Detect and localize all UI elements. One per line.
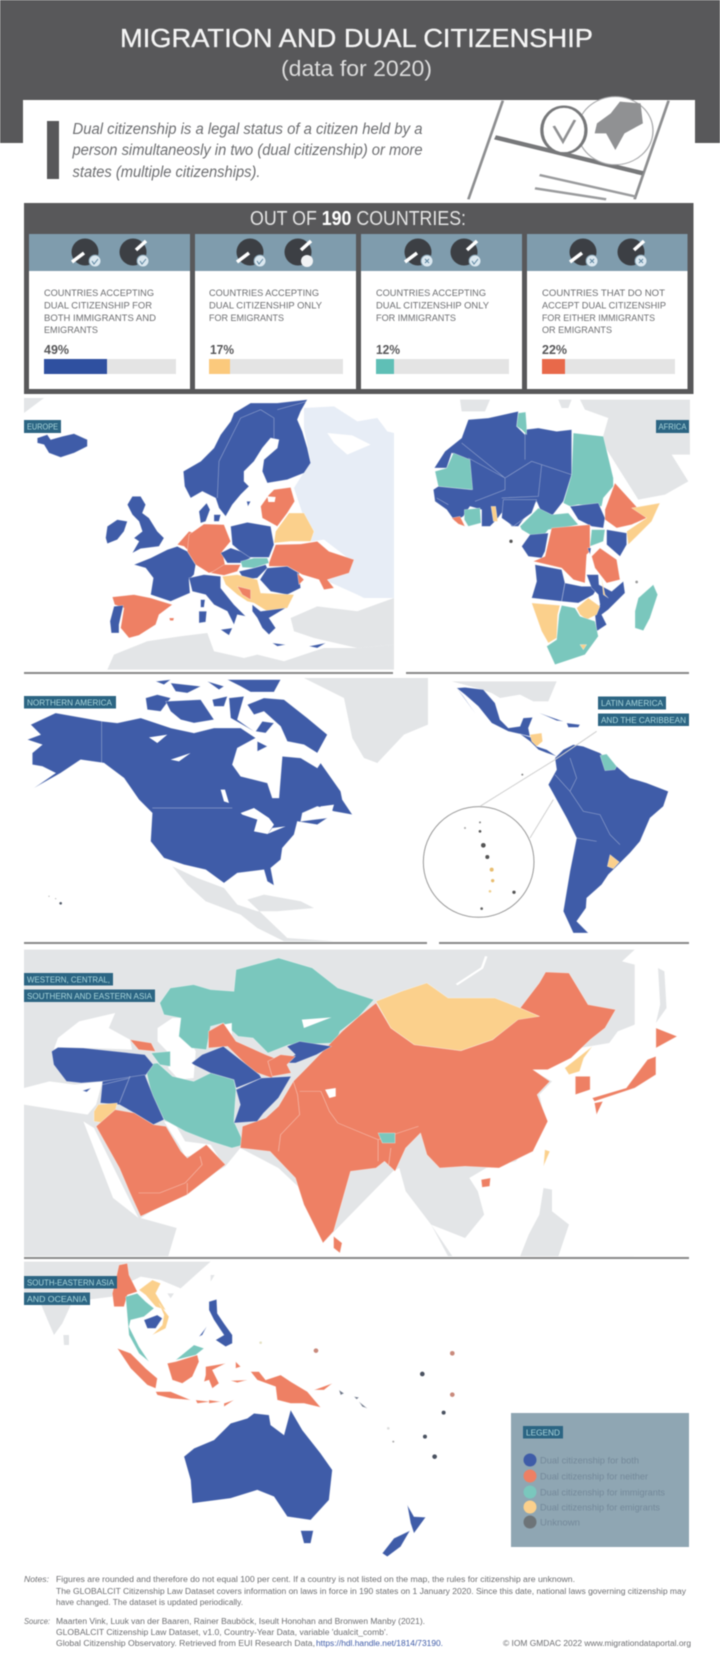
legend: Dual citizenship for both [540, 1456, 639, 1466]
label: Northern America [24, 696, 116, 708]
map: Northern America [27, 678, 428, 941]
notes: Notes: [24, 1575, 49, 1584]
card: both: 49% [44, 342, 69, 357]
source: Maarten Vink, Luuk van der Baaren, Rainer Bauböck, Iseult Honohan and Bronwen Manby (2021). [56, 1617, 425, 1626]
legend: Dual citizenship for emigrants [540, 1502, 660, 1514]
label: Africa [656, 420, 689, 433]
card: both: DUAL CITIZENSHIP FOR [44, 300, 152, 312]
label: Africa: AFRICA [658, 422, 687, 432]
card: neither: OR EMIGRANTS [542, 325, 612, 336]
legend: Unknown [540, 1518, 580, 1528]
notes [24, 1575, 686, 1607]
card: neither: COUNTRIES THAT DO NOT [542, 288, 665, 299]
card: both: COUNTRIES ACCEPTING [44, 288, 154, 299]
label: Northern America: NORTHERN AMERICA [27, 698, 113, 708]
card: immigrants only: 12% [376, 342, 400, 357]
legend: LEGEND [526, 1428, 560, 1438]
notes: have changed. The dataset is updated periodically. [56, 1598, 243, 1607]
map: Europe [24, 398, 394, 670]
source: https://hdl.handle.net/1814/73190. [316, 1639, 443, 1648]
label: Latin America and the Caribbean: AND THE CARIBBEAN [601, 716, 686, 725]
card: immigrants only: FOR IMMIGRANTS [376, 313, 456, 324]
card: immigrants only: DUAL CITIZENSHIP ONLY [376, 300, 490, 312]
notes: The GLOBALCIT Citizenship Law Dataset covers information on laws in force in 190 states on 1 January 2020. Since this date, national laws governing citizenship may [56, 1587, 686, 1596]
source [24, 1617, 443, 1648]
card: neither: 22% [542, 342, 567, 357]
subtitle: (data for 2020) [281, 56, 432, 81]
panel heading: OUT OF 190 COUNTRIES: [250, 208, 466, 230]
label: Europe [24, 420, 61, 433]
card: emigrants only: DUAL CITIZENSHIP ONLY [209, 300, 323, 312]
card: both: BOTH IMMIGRANTS AND [44, 313, 156, 324]
label: Latin America and the Caribbean [598, 696, 689, 726]
card: both [29, 234, 190, 389]
label: Europe: EUROPE [27, 422, 58, 432]
label: Latin America and the Caribbean: LATIN AMERICA [601, 699, 664, 708]
card: immigrants only: COUNTRIES ACCEPTING [376, 288, 486, 299]
card: emigrants only: FOR EMIGRANTS [209, 313, 284, 324]
card: both: EMIGRANTS [44, 325, 98, 336]
label: South-Eastern Asia and Oceania [24, 1276, 117, 1305]
card: neither: ACCEPT DUAL CITIZENSHIP [542, 300, 666, 312]
legend [511, 1413, 689, 1547]
source: Source: [24, 1617, 50, 1626]
intro text block: person simultaneosly in two (dual citizenship) or more [72, 142, 423, 159]
card: emigrants only: 17% [210, 342, 234, 357]
inset: Caribbean islands [423, 731, 597, 917]
copyright: © IOM GMDAC 2022 www.migrationdataportal.org [503, 1639, 691, 1648]
title: MIGRATION AND DUAL CITIZENSHIP [120, 25, 593, 53]
source: GLOBALCIT Citizenship Law Dataset, v1.0, Country-Year Data, variable 'dualcit_comb'. [56, 1628, 388, 1637]
intro text block [47, 121, 423, 181]
label: Western, Central, Southern and Eastern Asia [24, 973, 155, 1002]
card: immigrants only [361, 234, 522, 389]
panel: out of 190 countries [24, 203, 694, 394]
label: Western, Central, Southern and Eastern Asia: WESTERN, CENTRAL, [27, 976, 110, 984]
card: neither [527, 234, 688, 389]
label: Western, Central, Southern and Eastern Asia: SOUTHERN AND EASTERN ASIA [27, 992, 153, 1001]
map: Latin America and the Caribbean [423, 681, 668, 933]
notes: Figures are rounded and therefore do not equal 100 per cent. If a country is not listed on the map, the rules for citizenship are unknown. [56, 1575, 575, 1584]
card: emigrants only [195, 234, 356, 389]
source: Global Citizenship Observatory. Retrieved from EUI Research Data, [56, 1639, 315, 1648]
label: South-Eastern Asia and Oceania: SOUTH-EASTERN ASIA [27, 1278, 115, 1288]
map: South-Eastern Asia and Oceania [24, 1262, 455, 1557]
legend: Dual citizenship for immigrants [540, 1488, 665, 1498]
intro text block: states (multiple citizenships). [72, 164, 260, 181]
map: Western, Central, Southern and Eastern Asia [24, 950, 689, 1256]
dividers [24, 672, 689, 1259]
intro text block: Dual citizenship is a legal status of a citizen held by a [72, 121, 423, 138]
map: Africa [433, 400, 690, 665]
card: neither: FOR EITHER IMMIGRANTS [542, 313, 655, 324]
icon: passport with globe and check stamp [468, 97, 669, 199]
legend: Dual citizenship for neither [540, 1472, 648, 1482]
header band [0, 0, 720, 143]
card: emigrants only: COUNTRIES ACCEPTING [209, 288, 319, 299]
label: South-Eastern Asia and Oceania: AND OCEANIA [27, 1295, 88, 1304]
